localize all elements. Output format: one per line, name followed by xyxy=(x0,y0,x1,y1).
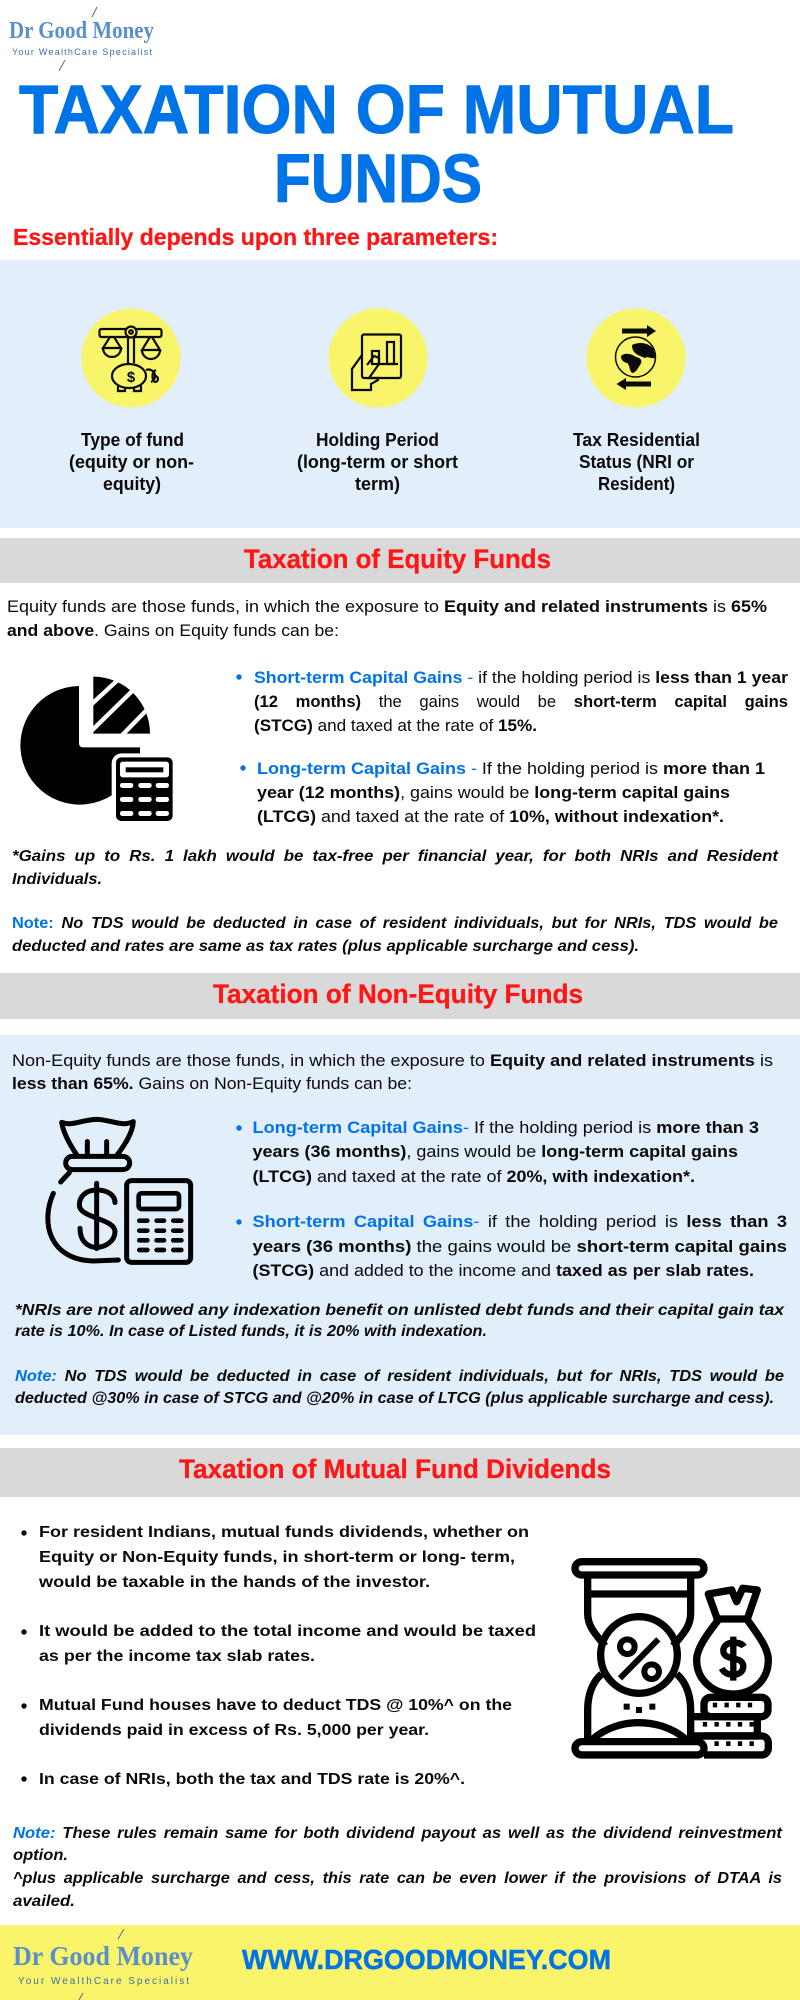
note: dividend rules: availed. xyxy=(13,1893,75,1910)
section header: equity funds xyxy=(0,538,800,583)
bullet: equity long-term: (LTCG) and taxed at the rate of 10%, without indexation*. xyxy=(257,807,724,826)
bullet: equity long-term: year (12 months) , gains would be long-term capital gains xyxy=(257,783,730,802)
bullet: total income: It would be added to the total income and would be taxed xyxy=(39,1623,536,1640)
section header: dividends: Taxation of Mutual Fund Dividends xyxy=(179,1454,611,1484)
text: non-equity intro: less than 65%. Gains on Non-Equity funds can be: xyxy=(12,1074,412,1093)
bullet: equity short-term: Short-term Capital Gains - if the holding period is less than 1 year xyxy=(254,668,789,687)
bullet: equity long-term: Long-term Capital Gains - If the holding period is more than 1 xyxy=(257,759,765,778)
bullet: NRIs rate: In case of NRIs, both the tax and TDS rate is 20%^. xyxy=(39,1771,465,1788)
icon: globe with exchange arrows xyxy=(586,308,686,408)
label: tax residential status: Status (NRI or xyxy=(579,452,694,472)
text: equity intro: and above . Gains on Equity funds can be: xyxy=(7,621,339,640)
bullet: non-equity short-term: Short-term Capital Gains - if the holding period is less than 3 xyxy=(252,1212,787,1231)
panel: non-equity funds xyxy=(0,1035,800,1435)
bullet: total income: as per the income tax slab rates. xyxy=(39,1648,315,1665)
footer logo: Your WealthCare Specialist xyxy=(18,1976,189,1987)
bullet: resident Indians xyxy=(21,1524,529,1591)
icon: hourglass with percent and money bag xyxy=(575,1562,768,1755)
logo: Dr Good Money: Your WealthCare Specialist xyxy=(12,47,152,57)
label: tax residential status xyxy=(573,430,700,494)
note: tax-free gains xyxy=(12,848,779,888)
note: dividend rules: ^plus applicable surcharge and cess, this rate can be even lower if the provisions of DTAA is xyxy=(13,1870,782,1887)
icon: balance scale and piggy bank: $ xyxy=(127,369,136,386)
note: tax-free gains: Individuals. xyxy=(12,871,102,888)
bullet: non-equity short-term xyxy=(236,1212,787,1280)
text: equity intro xyxy=(7,597,767,640)
label: holding period: (long-term or short xyxy=(297,452,458,472)
bullet: TDS on dividends: Mutual Fund houses have to deduct TDS @ 10%^ on the xyxy=(39,1697,512,1714)
bullet: non-equity short-term: (STCG) and added to the income and taxed as per slab rates. xyxy=(252,1261,754,1280)
text: non-equity intro xyxy=(12,1051,773,1093)
label: tax residential status: Tax Residential xyxy=(573,430,700,450)
panel: three parameters xyxy=(0,260,800,528)
footer logo xyxy=(13,1929,193,2000)
footer banner xyxy=(0,1925,800,2000)
label: type of fund: Type of fund xyxy=(81,430,184,450)
logo: Dr Good Money: Dr Good Money xyxy=(9,18,154,44)
icon: money bag with calculator xyxy=(48,1119,191,1262)
subheading: three parameters: Essentially depends upon three parameters: xyxy=(13,224,498,250)
icon: hand holding bar chart card xyxy=(328,308,428,408)
text: non-equity intro: Non-Equity funds are those funds, in which the exposure to Equity and related instruments is xyxy=(12,1051,773,1070)
title: FUNDS xyxy=(274,140,482,217)
note: TDS equity xyxy=(12,915,778,955)
section header: dividends xyxy=(0,1448,800,1497)
bullet: non-equity long-term xyxy=(236,1118,759,1186)
bullet: TDS on dividends xyxy=(21,1697,512,1739)
logo: Dr Good Money xyxy=(9,7,154,71)
note: dividend rules: option. xyxy=(13,1847,68,1864)
note: TDS equity: deducted and rates are same as tax rates (plus applicable surcharge and cess). xyxy=(12,938,639,955)
note: TDS non-equity: deducted @30% in case of STCG and @20% in case of LTCG (plus applicable surcharge and cess). xyxy=(15,1390,774,1407)
note: TDS equity: Note: No TDS would be deducted in case of resident individuals, but for NRIs, TDS would be xyxy=(12,915,778,932)
label: holding period xyxy=(297,430,458,494)
bullet: equity short-term: (12 months) the gains would be short-term capital gains xyxy=(254,692,788,711)
icon: pie chart with calculator xyxy=(20,677,173,821)
label: holding period: Holding Period xyxy=(316,430,439,450)
label: holding period: term) xyxy=(355,474,400,494)
label: tax residential status: Resident) xyxy=(598,474,675,494)
bullet: equity short-term xyxy=(236,668,789,735)
bullet: non-equity short-term: years (36 months) the gains would be short-term capital gains xyxy=(252,1237,787,1256)
note: tax-free gains: *Gains up to Rs. 1 lakh would be tax-free per financial year, for both NRIs and Resident xyxy=(12,848,779,865)
section header: equity funds: Taxation of Equity Funds xyxy=(244,544,551,574)
section header: non-equity funds: Taxation of Non-Equity Funds xyxy=(213,979,583,1009)
note: NRI indexation: rate is 10%. In case of Listed funds, it is 20% with indexation. xyxy=(15,1323,487,1340)
title: TAXATION OF MUTUAL xyxy=(19,71,734,148)
bullet: total income xyxy=(21,1623,536,1665)
bullet: non-equity long-term: Long-term Capital Gains - If the holding period is more than 3 xyxy=(252,1118,759,1137)
note: NRI indexation: *NRIs are not allowed any indexation benefit on unlisted debt funds and their capital gain tax xyxy=(15,1302,786,1319)
bullet: resident Indians: Equity or Non-Equity funds, in short-term or long- term, xyxy=(39,1549,515,1566)
footer website: WWW.DRGOODMONEY.COM xyxy=(242,1944,611,1975)
note: dividend rules xyxy=(13,1825,783,1910)
footer logo: Dr Good Money xyxy=(13,1941,193,1971)
text: equity intro: Equity funds are those funds, in which the exposure to Equity and related instruments is 65% xyxy=(7,597,767,616)
label: type of fund xyxy=(69,430,194,494)
bullet: non-equity long-term: (LTCG) and taxed at the rate of 20%, with indexation*. xyxy=(252,1167,695,1186)
label: type of fund: equity) xyxy=(103,474,161,494)
section header: non-equity funds xyxy=(0,973,800,1019)
bullet: non-equity long-term: years (36 months) , gains would be long-term capital gains xyxy=(252,1142,738,1161)
bullet: equity long-term xyxy=(240,759,765,826)
bullet: resident Indians: would be taxable in the hands of the investor. xyxy=(38,1574,430,1591)
bullet: TDS on dividends: dividends paid in excess of Rs. 5,000 per year. xyxy=(39,1722,429,1739)
note: TDS non-equity: Note: No TDS would be deducted in case of resident individuals, but for NRIs, TDS would be xyxy=(15,1368,784,1385)
note: NRI indexation xyxy=(15,1302,786,1340)
icon: balance scale and piggy bank xyxy=(82,308,180,408)
bullet: resident Indians: For resident Indians, mutual funds dividends, whether on xyxy=(39,1524,529,1541)
note: dividend rules: Note: These rules remain same for both dividend payout as well as the dividend reinvestment xyxy=(13,1825,783,1842)
note: TDS non-equity xyxy=(15,1368,784,1407)
bullet: equity short-term: (STCG) and taxed at the rate of 15%. xyxy=(254,716,537,735)
title xyxy=(19,71,734,217)
label: type of fund: (equity or non- xyxy=(69,452,194,472)
